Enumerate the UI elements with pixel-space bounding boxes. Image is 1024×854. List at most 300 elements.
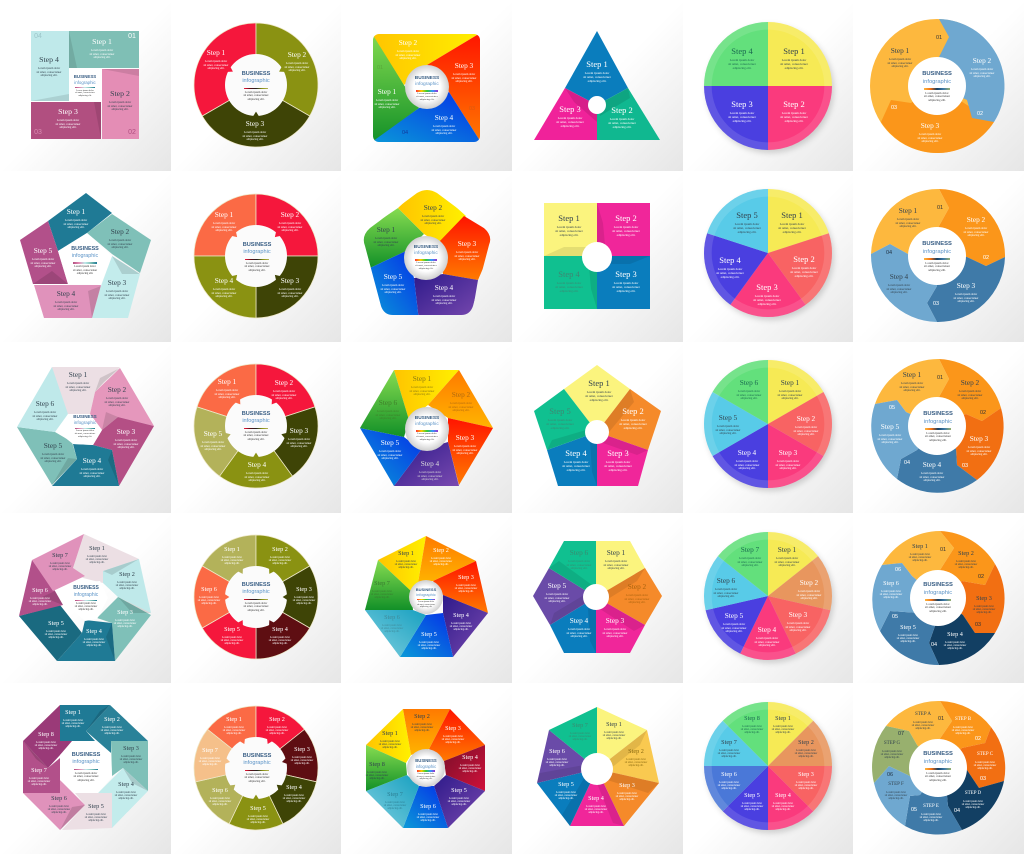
segment: step 3 xyxy=(597,432,648,486)
step 4 text: Step 4 xyxy=(83,456,101,465)
segment: step 6 xyxy=(713,360,768,424)
step 1 text: sit amet, consectetuer xyxy=(555,229,583,233)
step B text xyxy=(938,715,988,735)
chart: pentagon xyxy=(512,342,683,513)
step 7 text: sit amet, consectetuer xyxy=(569,735,591,738)
step 2 text: Step 2 xyxy=(288,50,306,59)
step 5 text: sit amet, consectetuer xyxy=(733,226,761,230)
step G text: STEP G xyxy=(884,741,900,746)
step 2 text: sit amet, consectetuer xyxy=(958,392,982,396)
step 2 text: sit amet, consectetuer xyxy=(430,560,452,563)
step 2 text: adipiscing elit. xyxy=(795,274,813,278)
step 1 text: Step 1 xyxy=(382,730,398,737)
step 5 text: Lorem ipsum dolor xyxy=(898,634,918,637)
center title: BUSINESS xyxy=(71,246,99,252)
step 4 text xyxy=(930,630,980,650)
step 5 text xyxy=(883,623,933,643)
chart: pie xyxy=(704,22,836,155)
step 3 text: sit amet, consectetuer xyxy=(753,298,781,302)
segment: step 1 xyxy=(394,370,459,420)
step 2 text: Step 2 xyxy=(414,713,430,720)
step 4 text: Step 4 xyxy=(57,289,75,298)
step 4 text xyxy=(544,269,594,294)
step 7 text: Lorem ipsum dolor xyxy=(739,556,761,560)
notch: step 5 xyxy=(223,430,232,440)
step 1 text: sit amet, consectetuer xyxy=(583,75,611,79)
step 2 text xyxy=(601,213,651,238)
step 5 text: Step 5 xyxy=(44,441,62,450)
step 1 text: Step 1 xyxy=(891,46,909,55)
step 6 text: Step 6 xyxy=(384,614,400,621)
step 5 text xyxy=(709,611,759,634)
step 1 text: Step 1 xyxy=(218,377,236,386)
segment: step 3 xyxy=(597,769,659,826)
step 4 text: Lorem ipsum dolor xyxy=(246,471,268,475)
center hole xyxy=(585,420,609,444)
step 7 text: adipiscing elit. xyxy=(721,755,737,758)
step 6 text: sit amet, consectetuer xyxy=(546,761,568,764)
segment: step 3 xyxy=(31,102,101,139)
step 3 text: sit amet, consectetuer xyxy=(604,464,632,468)
step 5 text: adipiscing elit. xyxy=(88,819,104,822)
step 4 text: adipiscing elit. xyxy=(923,478,941,482)
step 1 text: Step 1 xyxy=(783,46,805,56)
step 3 text: Step 3 xyxy=(108,278,126,287)
segment: step 3 xyxy=(92,256,140,318)
step 7 text xyxy=(185,746,235,766)
step 1 text: adipiscing elit. xyxy=(560,233,578,237)
step 1 text: adipiscing elit. xyxy=(899,224,917,228)
step 6 text: adipiscing elit. xyxy=(549,764,565,767)
step 1 text: Step 1 xyxy=(224,546,240,553)
step A text: adipiscing elit. xyxy=(915,727,931,730)
step 6 text: sit amet, consectetuer xyxy=(567,562,591,566)
segment: step 3 xyxy=(256,256,318,318)
segment: step 3 xyxy=(440,216,490,280)
step 1 text: sit amet, consectetuer xyxy=(86,558,108,561)
center title: infographic xyxy=(242,589,270,595)
number 05: 05 xyxy=(892,614,898,620)
step 4 text xyxy=(551,448,601,473)
segment: step 2 xyxy=(90,368,154,430)
step 1 text: Lorem ipsum dolor xyxy=(380,740,400,743)
step 5 text xyxy=(434,786,484,806)
segment: step 2 xyxy=(87,214,151,273)
segment: step 2 xyxy=(768,392,832,456)
step 7 text: sit amet, consectetuer xyxy=(49,565,71,568)
step 3 text xyxy=(601,269,651,294)
center hub xyxy=(909,739,967,797)
step 2 text: Step 2 xyxy=(424,203,442,212)
step 7 text: Lorem ipsum dolor xyxy=(29,777,49,780)
step 6 text: Step 6 xyxy=(721,771,737,778)
step 2 text: adipiscing elit. xyxy=(452,408,470,412)
step 5 text xyxy=(722,210,772,235)
step 3 text: sit amet, consectetuer xyxy=(455,587,477,590)
step 4 text: sit amet, consectetuer xyxy=(735,462,759,466)
step 1 text: adipiscing elit. xyxy=(67,225,85,229)
step 2 text: adipiscing elit. xyxy=(111,245,129,249)
chart: pie xyxy=(683,342,854,513)
step 1 text: Step 1 xyxy=(588,378,610,388)
notch: step 1 xyxy=(229,229,240,240)
center title xyxy=(74,74,96,97)
step 5 text xyxy=(71,802,121,822)
chart: pie xyxy=(683,513,854,684)
step 4 text: sit amet, consectetuer xyxy=(567,630,591,634)
step 3 text: Lorem ipsum dolor xyxy=(244,130,266,134)
chart: square pinwheel xyxy=(31,31,139,139)
step 4 text: adipiscing elit. xyxy=(453,628,469,631)
step 3 text xyxy=(773,610,823,632)
step 5 text: Step 5 xyxy=(736,210,758,220)
segment: step 3 xyxy=(938,564,1005,633)
segment: step 6 xyxy=(194,566,256,628)
segment: step 6 xyxy=(704,766,768,811)
step 7 text: sit amet, consectetuer xyxy=(718,752,740,755)
panel: pie, 7 steps xyxy=(683,513,854,684)
step 5 text: Step 5 xyxy=(451,787,467,794)
step 1 text: Lorem ipsum dolor xyxy=(222,556,242,559)
step 2 text xyxy=(608,105,636,129)
number 04: 04 xyxy=(904,460,910,466)
step 5 text: adipiscing elit. xyxy=(719,431,737,435)
segment: step 5 xyxy=(534,389,597,450)
center title: adipiscing elit. xyxy=(420,98,434,101)
step 5 text xyxy=(365,438,415,460)
step 2 text: sit amet, consectetuer xyxy=(269,559,291,562)
step 4 text: sit amet, consectetuer xyxy=(418,474,442,478)
step 6 text: sit amet, consectetuer xyxy=(714,590,738,594)
notch: step 5 xyxy=(236,618,246,628)
step 1 text xyxy=(381,549,431,569)
step 3 text xyxy=(602,781,652,801)
segment: step 4 xyxy=(374,92,479,142)
step 5 text: Lorem ipsum dolor xyxy=(735,222,759,226)
step 3 text: sit amet, consectetuer xyxy=(114,442,138,446)
center title xyxy=(919,582,957,613)
center hub xyxy=(66,581,108,621)
step 1 text xyxy=(72,544,122,564)
center title: infographic xyxy=(923,79,951,85)
step 4 text: Step 4 xyxy=(272,626,288,633)
step 5 text: adipiscing elit. xyxy=(900,640,916,643)
step 4 text: adipiscing elit. xyxy=(462,770,478,773)
center square xyxy=(69,68,102,102)
number 04: 04 xyxy=(931,642,937,648)
step 5 text xyxy=(233,804,283,824)
step 2 text: Lorem ipsum dolor xyxy=(117,581,137,584)
center title: infographic xyxy=(923,249,951,255)
step 1 text: Lorem ipsum dolor xyxy=(587,390,611,394)
step 6 text xyxy=(701,576,751,598)
step 3 text: Step 3 xyxy=(779,448,797,457)
step 1 text: Lorem ipsum dolor xyxy=(376,98,398,102)
step 3 text: sit amet, consectetuer xyxy=(442,738,464,741)
step 1 text: adipiscing elit. xyxy=(413,392,431,396)
step 3 text: adipiscing elit. xyxy=(458,257,476,261)
step 2 text xyxy=(284,50,310,72)
segment: step 2 xyxy=(768,233,832,305)
chart: ring xyxy=(171,342,342,513)
segment: step 6 xyxy=(704,556,768,610)
step 3 text: Step 3 xyxy=(798,771,814,778)
step F text xyxy=(871,780,921,800)
step 3 text: adipiscing elit. xyxy=(281,294,299,298)
center hub xyxy=(908,57,966,115)
segment: step 2 xyxy=(103,559,151,613)
step 4 text: Lorem ipsum dolor xyxy=(586,805,606,808)
step 3 text: Step 3 xyxy=(615,269,637,279)
step 2 text: adipiscing elit. xyxy=(281,228,299,232)
step 2 text xyxy=(396,38,420,60)
step 1 text xyxy=(90,37,114,59)
step 4 text: Lorem ipsum dolor xyxy=(736,459,758,463)
step 4 text: adipiscing elit. xyxy=(560,289,578,293)
step D text: STEP D xyxy=(965,791,981,796)
segment: step 6 xyxy=(403,786,448,828)
step 2 text xyxy=(781,738,831,758)
step 2 text: adipiscing elit. xyxy=(613,125,631,129)
segment: step 5 xyxy=(706,596,768,654)
step 8 text: sit amet, consectetuer xyxy=(741,728,763,731)
segment: step 3 xyxy=(534,88,597,140)
step 2 text: Lorem ipsum dolor xyxy=(450,401,472,405)
step 3 text: Lorem ipsum dolor xyxy=(755,294,779,298)
step 2 text: sit amet, consectetuer xyxy=(411,726,433,729)
step 2 text: Lorem ipsum dolor xyxy=(431,557,451,560)
chart: ring xyxy=(194,194,318,318)
step 4 text: sit amet, consectetuer xyxy=(80,470,104,474)
step 1 text: Lorem ipsum dolor xyxy=(205,59,227,63)
center title: adipiscing elit. xyxy=(78,95,92,97)
step 5 text: Step 5 xyxy=(250,805,266,812)
segment: step 3 xyxy=(881,86,994,153)
chart: ring xyxy=(171,513,342,684)
step 3 text: Step 3 xyxy=(458,239,476,248)
step 3 text xyxy=(100,608,150,628)
panel: arrow ring, 6 steps xyxy=(853,513,1024,684)
step 2 text: adipiscing elit. xyxy=(399,56,417,60)
chart: ring xyxy=(194,22,318,148)
segment: step 1 xyxy=(208,706,256,768)
step C text: sit amet, consectetuer xyxy=(974,764,996,767)
step 2 text: sit amet, consectetuer xyxy=(116,584,138,587)
step 2 text xyxy=(779,254,829,279)
step 2 text: adipiscing elit. xyxy=(288,68,306,72)
step 4 text: Step 4 xyxy=(558,269,580,279)
step 3 text: sit amet, consectetuer xyxy=(612,285,640,289)
step 6 text: Lorem ipsum dolor xyxy=(210,797,230,800)
step 5 text: Step 5 xyxy=(34,246,52,255)
step D text: adipiscing elit. xyxy=(965,806,981,809)
center title: Lorem ipsum dolor xyxy=(76,602,96,605)
step 3 text xyxy=(274,426,324,448)
center title xyxy=(242,71,270,101)
step 6 text: sit amet, consectetuer xyxy=(376,412,400,416)
step 4 text: Step 4 xyxy=(462,754,478,761)
step 3 text: Step 3 xyxy=(731,99,753,109)
step 3 text: Step 3 xyxy=(246,119,264,128)
center title xyxy=(922,71,952,102)
step 4 text xyxy=(69,627,119,647)
notch: step 1 xyxy=(237,736,248,746)
step 1 text: Step 1 xyxy=(89,545,105,552)
segment: step 4 xyxy=(570,769,624,826)
step A text: sit amet, consectetuer xyxy=(912,724,934,727)
step 6 text: adipiscing elit. xyxy=(51,811,67,814)
step 5 text: Lorem ipsum dolor xyxy=(382,283,404,287)
step 5 text: adipiscing elit. xyxy=(551,426,569,430)
step 5 text: sit amet, consectetuer xyxy=(722,626,746,630)
step 3 text: sit amet, consectetuer xyxy=(120,758,142,761)
center title: adipiscing elit. xyxy=(247,97,265,101)
step 4 text: Lorem ipsum dolor xyxy=(460,764,480,767)
step 4 text: Lorem ipsum dolor xyxy=(55,300,77,304)
step 3 text xyxy=(954,434,1004,456)
step F text: sit amet, consectetuer xyxy=(885,794,907,797)
step 2 text: adipiscing elit. xyxy=(800,596,818,600)
step 2 text: adipiscing elit. xyxy=(798,755,814,758)
segment: step 3 xyxy=(433,561,488,613)
step 6 text: Step 6 xyxy=(201,586,217,593)
step 2 text: Lorem ipsum dolor xyxy=(106,396,128,400)
step 4 text: Step 4 xyxy=(215,276,233,285)
segment: step 5 xyxy=(880,598,939,665)
segment: step 4 xyxy=(444,745,485,791)
step 2 text: Lorem ipsum dolor xyxy=(782,111,806,115)
step 7 text: Step 7 xyxy=(52,552,68,559)
segment: step 2 xyxy=(597,203,650,256)
segment: step 8 xyxy=(723,702,768,766)
step 6 text: sit amet, consectetuer xyxy=(198,599,220,602)
step 7 text xyxy=(704,738,754,758)
step 1 text: adipiscing elit. xyxy=(65,725,81,728)
step 2 text xyxy=(259,378,309,400)
number 01: 01 xyxy=(937,375,943,381)
segment: step 2 xyxy=(374,34,478,85)
step 1 text: Lorem ipsum dolor xyxy=(782,58,806,62)
step 4 text: Lorem ipsum dolor xyxy=(451,622,471,625)
number 05: 05 xyxy=(889,405,895,411)
step 1 text: sit amet, consectetuer xyxy=(888,60,912,64)
step 6 text: sit amet, consectetuer xyxy=(381,627,403,630)
step 5 text: Lorem ipsum dolor xyxy=(32,257,54,261)
step 3 text: Lorem ipsum dolor xyxy=(919,132,941,136)
step 4 text xyxy=(419,283,469,306)
step 6 text: Lorem ipsum dolor xyxy=(49,805,69,808)
step 1 text: Lorem ipsum dolor xyxy=(585,71,609,75)
segment: step 3 xyxy=(111,741,148,791)
step 2 text: adipiscing elit. xyxy=(104,732,120,735)
step 6 text xyxy=(34,794,84,814)
step 2 text: Lorem ipsum dolor xyxy=(412,723,432,726)
center title: sit amet, consectetuer xyxy=(244,264,270,268)
step 1 text xyxy=(48,708,98,728)
step 2 text: Step 2 xyxy=(452,390,470,399)
step 1 text: sit amet, consectetuer xyxy=(395,563,417,566)
center title: sit amet, consectetuer xyxy=(73,269,97,272)
step 6 text xyxy=(403,802,453,822)
step 2 text: Step 2 xyxy=(433,547,449,554)
step 7 text: Step 7 xyxy=(572,722,588,729)
segment: step 1 xyxy=(875,359,949,426)
step 2 text: adipiscing elit. xyxy=(269,732,285,735)
segment: step 6 xyxy=(360,370,409,437)
step 1 text: sit amet, consectetuer xyxy=(410,388,434,392)
center hub xyxy=(409,580,443,614)
step 1 text: Step 1 xyxy=(586,59,608,69)
segment: step 1 xyxy=(565,31,628,105)
segment: step 4 xyxy=(443,595,488,657)
step 4 text: Step 4 xyxy=(588,795,604,802)
step 1 text: Step 1 xyxy=(65,709,81,716)
segment: step 5 xyxy=(871,400,937,479)
center title xyxy=(238,582,274,612)
step 1 text: sit amet, consectetuer xyxy=(775,560,799,564)
step 3 text: sit amet, consectetuer xyxy=(973,608,995,611)
step 3 text: Step 3 xyxy=(455,61,473,70)
step 4 text: Lorem ipsum dolor xyxy=(284,794,304,797)
step 1 text: adipiscing elit. xyxy=(775,731,791,734)
step 2 text xyxy=(416,546,466,566)
segment: step 4 xyxy=(220,426,292,488)
step 3 text: Step 3 xyxy=(458,574,474,581)
step 2 text: Lorem ipsum dolor xyxy=(971,67,993,71)
center title: BUSINESS xyxy=(242,582,270,588)
number 02: 02 xyxy=(983,255,989,261)
segment: step 4 xyxy=(394,442,459,486)
step 7 text: sit amet, consectetuer xyxy=(28,780,50,783)
step 6 text: sit amet, consectetuer xyxy=(209,800,231,803)
panel: triangle, 3 steps xyxy=(512,0,683,171)
center hub xyxy=(60,741,112,793)
step 3 text: sit amet, consectetuer xyxy=(287,440,311,444)
step 3 text: adipiscing elit. xyxy=(123,761,139,764)
step 3 text: adipiscing elit. xyxy=(609,468,627,472)
step 8 text xyxy=(21,730,71,750)
step 6 text: adipiscing elit. xyxy=(570,566,588,570)
step 2 text: sit amet, consectetuer xyxy=(790,270,818,274)
notch: step 2 xyxy=(266,566,276,576)
notch: step 2 xyxy=(277,65,287,75)
step 3 text: Lorem ipsum dolor xyxy=(777,459,799,463)
step 1 text xyxy=(895,542,945,562)
step 3 text: Lorem ipsum dolor xyxy=(456,584,476,587)
step G text: adipiscing elit. xyxy=(884,756,900,759)
step 6 text: adipiscing elit. xyxy=(721,787,737,790)
step 1 text: Step 1 xyxy=(377,225,395,234)
step 3 text: sit amet, consectetuer xyxy=(776,462,800,466)
step 6 text: Step 6 xyxy=(51,795,67,802)
panel: heptagon pinwheel, 7 steps xyxy=(341,513,512,684)
center title xyxy=(239,242,275,272)
segment: step 4 xyxy=(194,256,256,318)
center title: BUSINESS xyxy=(242,71,270,77)
step 2 text xyxy=(92,385,142,408)
step 8 text: adipiscing elit. xyxy=(369,777,385,780)
step 4 text: Step 4 xyxy=(565,448,587,458)
segment: step 2 xyxy=(937,189,1005,266)
step 1 text: Step 1 xyxy=(607,548,625,557)
segment: step 5 xyxy=(707,189,768,253)
step 2 text: Step 2 xyxy=(611,105,633,115)
step 5 text xyxy=(368,272,418,294)
step 1 text: sit amet, consectetuer xyxy=(772,728,794,731)
step 1 text: adipiscing elit. xyxy=(224,562,240,565)
center title: infographic xyxy=(72,253,98,259)
step 8 text: adipiscing elit. xyxy=(744,731,760,734)
